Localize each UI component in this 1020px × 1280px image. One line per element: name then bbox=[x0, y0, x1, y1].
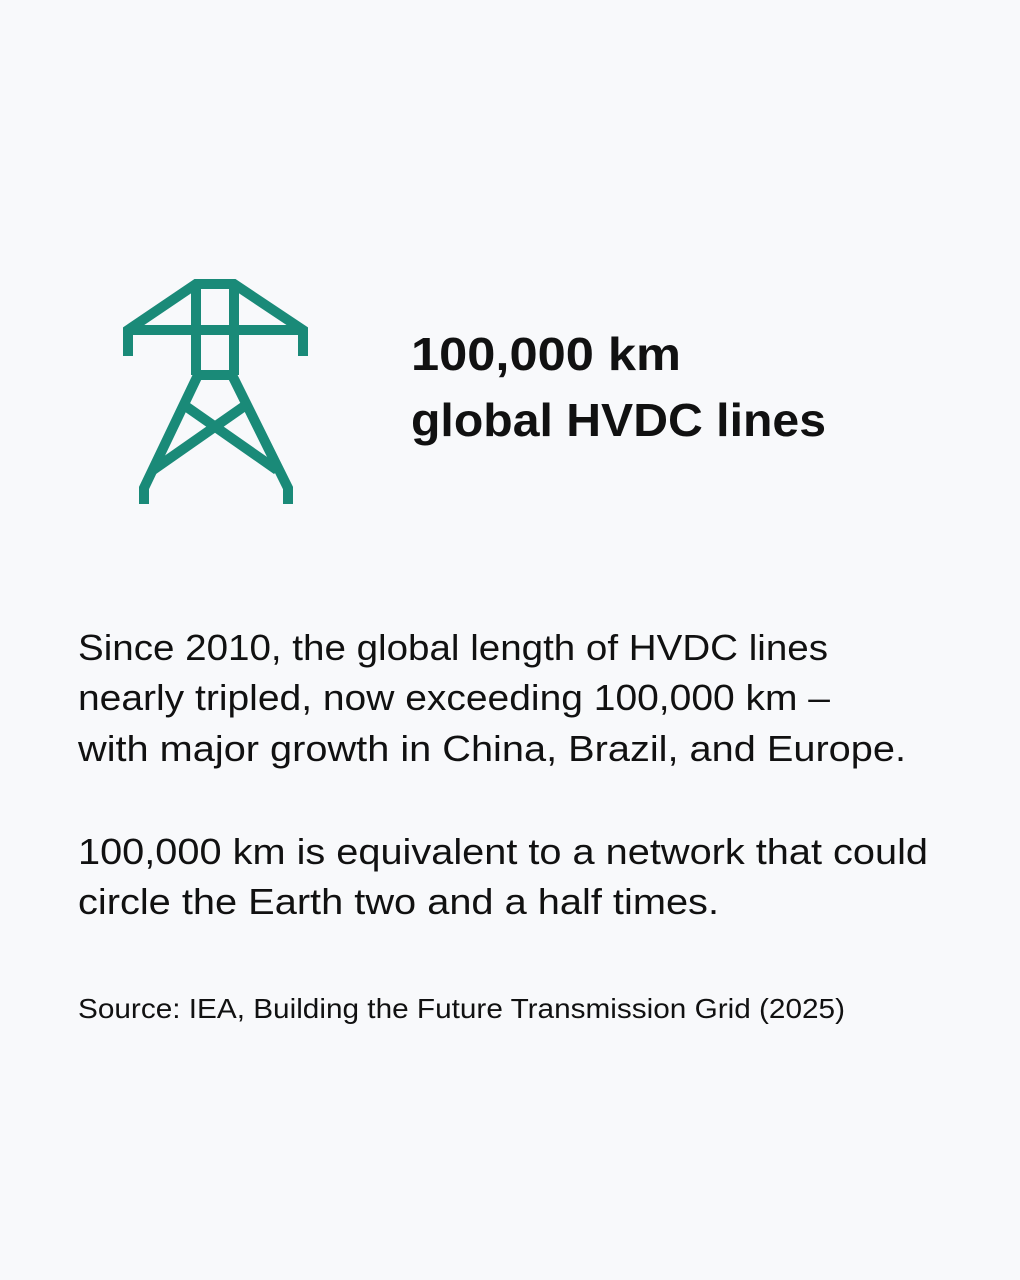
source: Source: IEA, Building the Future Transmission Grid (2025) bbox=[78, 993, 845, 1024]
text block: description: nearly tripled, now exceeding 100,000 km – bbox=[78, 677, 830, 718]
text block: comparison bbox=[78, 831, 928, 922]
text block: description: Since 2010, the global length of HVDC lines bbox=[78, 627, 828, 668]
text block: comparison: circle the Earth two and a half times. bbox=[78, 881, 719, 922]
text block: description bbox=[77, 627, 906, 769]
title: 100,000 km bbox=[411, 328, 681, 380]
text block: comparison: 100,000 km is equivalent to a network that could bbox=[78, 831, 928, 872]
text block: description: with major growth in China, Brazil, and Europe. bbox=[77, 728, 906, 769]
title bbox=[411, 328, 826, 446]
icon: transmission tower bbox=[128, 284, 303, 504]
title: global HVDC lines bbox=[411, 394, 826, 446]
